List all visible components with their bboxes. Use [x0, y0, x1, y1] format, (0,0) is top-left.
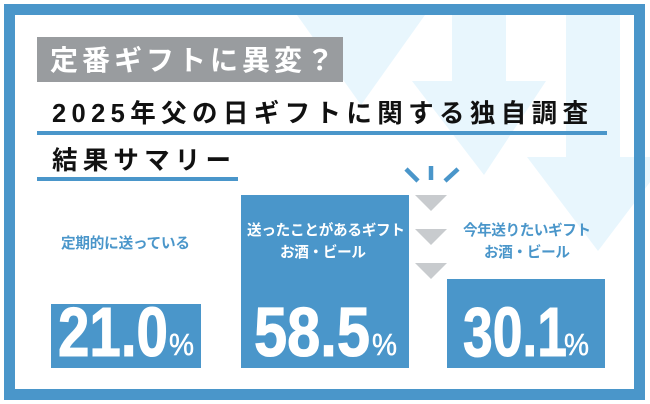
panel: regularly send: 21.0 [58, 293, 168, 371]
panel: regularly send [51, 234, 201, 371]
panel: want to send this year: お酒・ビール [484, 243, 570, 261]
background arrows [297, 15, 650, 251]
panel: have sent: 送ったことがあるギフト [247, 221, 405, 239]
panel: regularly send: % [169, 327, 194, 362]
panel: have sent: 58.5 [254, 293, 370, 371]
heading badge [37, 37, 343, 82]
icon: down triangles [415, 195, 447, 279]
title: 2025年父の日ギフトに関する独自調査 [52, 100, 588, 128]
panel: have sent: お酒・ビール [280, 243, 366, 261]
panel: have sent: % [372, 327, 397, 362]
panel: want to send this year [447, 221, 605, 371]
panel: want to send this year: 30.1 [463, 293, 567, 371]
heading badge: 定番ギフトに異変？ [50, 45, 334, 76]
panel: want to send this year: % [564, 327, 589, 362]
panel: regularly send: 定期的に送っている [61, 234, 190, 252]
panel: want to send this year: 今年送りたいギフト [463, 221, 591, 239]
icon: emphasis ticks [406, 166, 458, 181]
panel: have sent [241, 195, 409, 371]
subtitle: 結果サマリー [52, 147, 231, 175]
